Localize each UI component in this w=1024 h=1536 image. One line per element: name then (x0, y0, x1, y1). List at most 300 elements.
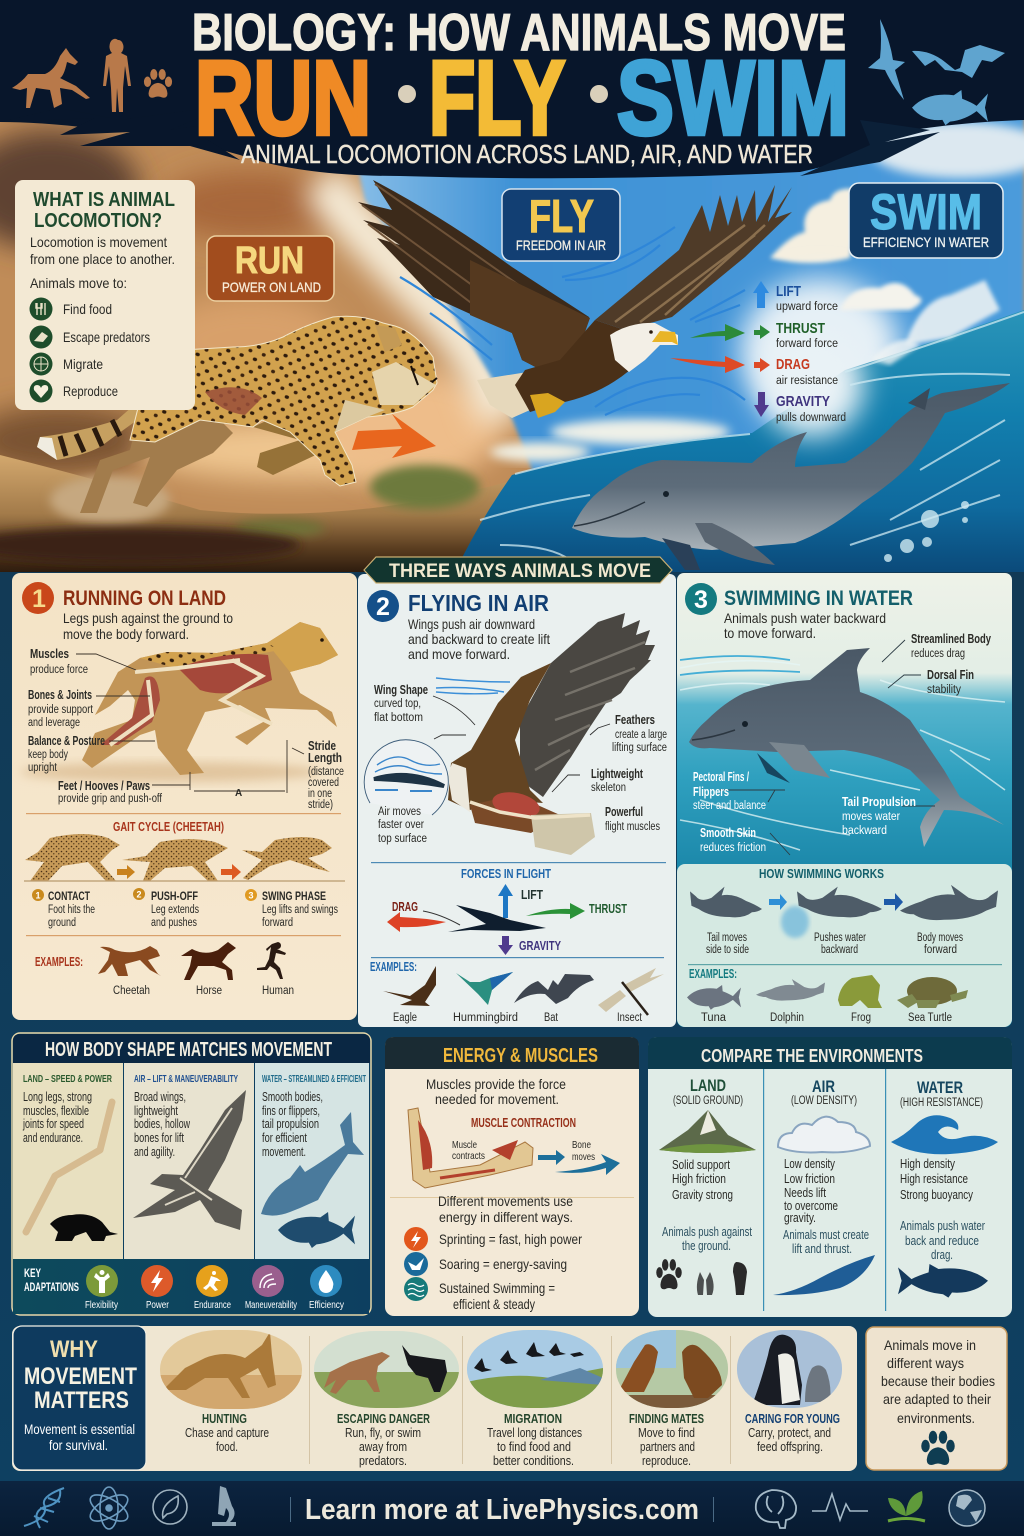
key adaptations strip (13, 1259, 369, 1314)
example: hummingbird (453, 972, 518, 1024)
column: land: Long legs, strong (23, 1090, 92, 1104)
column: water: Smooth bodies, (262, 1090, 323, 1104)
icon: efficiency: Efficiency (309, 1300, 344, 1311)
number badge 1 (22, 582, 54, 614)
heading: FLYING IN AIR (408, 590, 549, 616)
right wing (595, 185, 792, 330)
callout: pectoral fins (693, 770, 766, 812)
icon: flexibility (85, 1265, 118, 1311)
column: land: Gravity strong (672, 1188, 733, 1202)
column: water (255, 1063, 369, 1259)
icon: power: Power (146, 1300, 170, 1311)
column: water (891, 1078, 998, 1298)
callout: streamlined body (911, 632, 991, 660)
step 2 push-off (133, 888, 199, 929)
icon: dna (24, 1488, 64, 1528)
panel 2: flying in air: Wings push air downward (408, 616, 535, 632)
callout: balance: upright (28, 762, 58, 774)
run word: RUN (195, 40, 371, 157)
callout box: closing message: environments. (897, 1410, 975, 1426)
icon: endurance (194, 1265, 231, 1311)
illustration: dark fish (278, 1212, 355, 1248)
examples label: EXAMPLES: (370, 960, 417, 974)
column: land: High friction (672, 1172, 726, 1186)
step 1 contact: 1 (36, 890, 41, 900)
column: air: Broad wings, (134, 1090, 186, 1104)
panel: compare the environments (648, 1037, 1012, 1317)
caption: migration: Travel long distances (487, 1426, 582, 1440)
forces legend: air resistance (776, 375, 838, 387)
step 1 contact: ground (48, 917, 76, 929)
callout: lightweight: skeleton (591, 782, 626, 794)
sub-panel: how swimming works: side to side (706, 944, 749, 956)
dolphin step 3 (900, 885, 998, 920)
callout: feathers: lifting surface (612, 742, 667, 754)
callout: wing shape: flat bottom (374, 712, 423, 724)
inset: airfoil diagram (364, 740, 448, 815)
force diagram: GRAVITY (519, 939, 562, 953)
example: cheetah (98, 946, 161, 997)
callout: muscles: Muscles (30, 647, 69, 661)
column: air (773, 1077, 875, 1295)
panel: energy and muscles: moves (572, 1151, 595, 1163)
separator dot (398, 85, 416, 103)
title line: BIOLOGY: HOW ANIMALS MOVE (192, 4, 846, 62)
panel: energy and muscles: Sprinting = fast, high power (439, 1231, 582, 1247)
column: land: the ground. (682, 1239, 731, 1253)
example: bat (514, 974, 594, 1024)
hero dolphin (572, 383, 1010, 570)
panel: energy and muscles: Bone (572, 1139, 591, 1151)
illustration: black cat (50, 1214, 118, 1241)
column: land: and endurance. (23, 1131, 83, 1145)
callout: dorsal fin: Dorsal Fin (927, 668, 974, 682)
icon: sprinting (404, 1227, 428, 1251)
panel: how body shape matches movement: HOW BODY SHAPE MATCHES MOVEMENT (45, 1039, 332, 1061)
panel: what is animal locomotion: Find food (63, 301, 112, 317)
callout box: closing message: different ways (887, 1355, 964, 1371)
column: water: back and reduce (905, 1234, 979, 1248)
callout: stride length: Length (308, 751, 342, 765)
vignette: escaping danger (314, 1331, 459, 1408)
icon: wave (891, 1115, 998, 1154)
panel: energy and muscles: energy in different ways. (439, 1209, 573, 1225)
gait heading: GAIT CYCLE (CHEETAH) (113, 820, 224, 834)
callout: air moves (378, 806, 427, 845)
panel: what is animal locomotion: Locomotion is movement (30, 234, 167, 250)
top title band (0, 0, 1024, 178)
step 3 swing phase: SWING PHASE (262, 889, 326, 903)
callout: muscles: produce force (30, 664, 88, 676)
icon: bird silhouette (868, 19, 905, 100)
callout: tail propulsion: moves water (842, 811, 900, 823)
number badge 3: 3 (694, 586, 708, 614)
step 2 push-off: and pushes (151, 917, 197, 929)
vignette: finding mates (616, 1330, 728, 1408)
swim word: SWIM (617, 40, 849, 157)
panel: energy and muscles: Muscles provide the force (426, 1076, 566, 1092)
forces legend: pulls downward (776, 412, 846, 424)
column: air: (LOW DENSITY) (791, 1095, 857, 1107)
caption: caring for young (745, 1412, 840, 1454)
panel 1: running on land: move the body forward. (63, 626, 189, 642)
force diagram: THRUST (589, 902, 627, 916)
body (515, 320, 630, 412)
callout: pectoral fins: steer and balance (693, 800, 766, 812)
forces legend (670, 281, 846, 424)
caption: migration: MIGRATION (504, 1412, 562, 1426)
panel 2: flying in air: and backward to create lift (408, 631, 550, 647)
vignette: migration (467, 1330, 603, 1408)
icon: heart (30, 380, 52, 402)
step 3 swing phase: forward (262, 917, 293, 929)
icon: maneuverability: Maneuverability (245, 1300, 297, 1311)
panel: energy and muscles: MUSCLE CONTRACTION (471, 1116, 576, 1130)
callout: lightweight (591, 767, 644, 794)
column: water: WATER – STREAMLINED & EFFICIENT (262, 1074, 366, 1085)
sea (455, 310, 1024, 572)
step 3 swing phase: 3 (248, 890, 254, 900)
caption: hunting (185, 1412, 269, 1454)
drag label: DRAG (776, 356, 810, 373)
step 1 contact: Foot hits the (48, 904, 95, 916)
icon: horse (12, 48, 90, 108)
column: air: to overcome (784, 1199, 838, 1213)
dolphin step 2 (797, 887, 882, 917)
example: frog: Frog (851, 1012, 871, 1024)
icon: globe (30, 352, 52, 376)
tail (37, 370, 160, 460)
heading: RUNNING ON LAND (63, 587, 226, 610)
run badge: RUN (235, 240, 304, 282)
callout: pectoral fins: Flippers (693, 785, 729, 799)
sub-panel: how swimming works: backward (821, 944, 858, 956)
icon: endurance: Endurance (194, 1300, 231, 1311)
callout: balance: keep body (28, 749, 68, 761)
column: land (13, 1063, 123, 1259)
column: air (124, 1063, 254, 1259)
example: insect (598, 968, 664, 1024)
column: water: (HIGH RESISTANCE) (900, 1097, 983, 1109)
hero cheetah running (37, 316, 437, 513)
column: land: Animals push against (662, 1225, 752, 1239)
example: horse (181, 942, 236, 997)
caption: escaping danger: Run, fly, or swim (345, 1426, 421, 1440)
panel: what is animal locomotion: from one place to another. (30, 251, 175, 267)
panel 2: flying in air (358, 574, 676, 1027)
column: water: Strong buoyancy (900, 1188, 974, 1202)
callout: air moves: Air moves (378, 806, 421, 818)
column: water: High resistance (900, 1172, 968, 1186)
icon: bat silhouette (912, 45, 1005, 78)
step 3 swing phase: Leg lifts and swings (262, 904, 338, 916)
callout box: closing message: are adapted to their (883, 1391, 991, 1407)
rear legs (80, 400, 233, 513)
callout: feathers: Feathers (615, 713, 655, 727)
example: dolphin: Dolphin (770, 1012, 804, 1024)
arrow: step (884, 893, 903, 911)
heading: SWIMMING IN WATER (724, 587, 913, 610)
icon: power (141, 1265, 173, 1311)
panel 3: swimming in water (677, 573, 1012, 1027)
talons (530, 393, 565, 418)
callout: tail propulsion (842, 795, 916, 837)
step 2 push-off: PUSH-OFF (151, 889, 198, 903)
arrow: lift (753, 281, 769, 308)
vignette: caring for young (737, 1330, 842, 1408)
caption: hunting: Chase and capture (185, 1426, 269, 1440)
example: frog (838, 975, 882, 1024)
icon: pulse (812, 1494, 868, 1520)
gravity label: GRAVITY (776, 393, 830, 410)
arrow: bone moves (555, 1154, 620, 1175)
callout: tail propulsion: backward (842, 825, 887, 837)
callout: stride length (308, 739, 344, 811)
caption: hunting: food. (216, 1440, 238, 1454)
tail (477, 370, 540, 418)
dolphin step 1 (690, 887, 762, 917)
key adaptations strip: ADAPTATIONS (24, 1280, 79, 1294)
sub-panel: how swimming works: Pushes water (814, 932, 866, 944)
forces heading: FORCES IN FLIGHT (461, 867, 551, 881)
icon: microscope (212, 1486, 236, 1526)
illustration: blue fish (261, 1112, 364, 1216)
run badge (207, 236, 334, 301)
example: insect: Insect (617, 1012, 643, 1024)
icon: human (103, 39, 131, 112)
sub-panel: how swimming works: HOW SWIMMING WORKS (759, 867, 884, 881)
step 3 swing phase (245, 889, 338, 929)
sub-panel: how swimming works (677, 864, 1012, 1027)
callout: bones: Bones & Joints (28, 688, 92, 702)
panel 1: running on land: Legs push against the ground to (63, 610, 233, 626)
title block: Movement is essential (24, 1422, 135, 1437)
column: land: (SOLID GROUND) (673, 1095, 743, 1107)
clouds (770, 189, 860, 263)
thrust label: THRUST (776, 320, 825, 337)
caption: finding mates (629, 1412, 704, 1468)
column: land (656, 1076, 756, 1295)
column: air: Needs lift (784, 1186, 826, 1200)
callout lines (433, 696, 610, 792)
icon: swimming (404, 1277, 428, 1301)
callout: muscles (30, 647, 88, 676)
arrow: gravity (754, 392, 769, 417)
title block: for survival. (49, 1438, 108, 1453)
key adaptations strip: KEY (24, 1266, 41, 1280)
caption: finding mates: Move to find (638, 1426, 695, 1440)
callout: powerful (605, 805, 660, 833)
section banner: three ways animals move: THREE WAYS ANIMALS MOVE (389, 561, 651, 582)
callout: feet: provide grip and push-off (58, 793, 163, 805)
caption: finding mates: partners and (640, 1440, 695, 1454)
panel 3: swimming in water: to move forward. (724, 625, 816, 641)
callout lines (76, 654, 304, 793)
column: air: bodies, hollow (134, 1117, 191, 1131)
caption: escaping danger (337, 1412, 430, 1468)
panel: energy and muscles: Soaring = energy-saving (439, 1256, 567, 1272)
caption: hunting: HUNTING (202, 1412, 247, 1426)
panel: what is animal locomotion: LOCOMOTION? (34, 210, 162, 232)
column: air: lift and thrust. (792, 1242, 852, 1256)
example: tuna: Tuna (701, 1012, 727, 1024)
step 2 push-off: Leg extends (151, 904, 199, 916)
column: water: WATER (917, 1078, 963, 1097)
footer link text: Learn more at LivePhysics.com (305, 1494, 699, 1526)
caption: caring for young: feed offspring. (757, 1440, 823, 1454)
callout: stride length: Stride (308, 739, 336, 753)
panel 1: running on land (12, 573, 357, 1020)
panel: energy and muscles: Muscle (452, 1139, 477, 1151)
column: air: bones for lift (134, 1131, 184, 1145)
header (648, 1037, 1012, 1069)
column: air: gravity. (784, 1211, 816, 1225)
callout: feet: Feet / Hooves / Paws (58, 779, 150, 793)
panel: energy and muscles: efficient & steady (453, 1296, 535, 1312)
icon: paw print (144, 69, 172, 98)
column: water: drag. (931, 1248, 953, 1262)
column: air: Low friction (784, 1172, 835, 1186)
callout: wing shape (374, 683, 428, 724)
gait illustrations (24, 834, 345, 881)
callout: stride length: in one (308, 788, 332, 800)
callout: stride length: covered (308, 777, 339, 789)
illustration: bird skeleton (133, 1090, 246, 1230)
example: dolphin (756, 979, 825, 1024)
title block: WHY (50, 1336, 98, 1363)
hero scene (0, 110, 1024, 572)
fly badge: FREEDOM IN AIR (516, 238, 606, 253)
arrow: drag (670, 356, 770, 373)
illustration: leg bone (26, 1102, 112, 1232)
fly badge (502, 189, 620, 261)
column: water: movement. (262, 1145, 306, 1159)
header (385, 1037, 639, 1069)
panel: energy and muscles: contracts (452, 1150, 485, 1162)
icon: find food (30, 298, 52, 320)
column: land: LAND – SPEED & POWER (23, 1074, 113, 1085)
callout: wing shape: curved top, (374, 698, 421, 710)
callout: bones: and leverage (28, 717, 80, 729)
caption: escaping danger: predators. (359, 1454, 407, 1468)
example: hummingbird: Hummingbird (453, 1012, 518, 1024)
column: water: Animals push water (900, 1219, 985, 1233)
far front leg (253, 410, 335, 475)
water streaks (680, 661, 1005, 850)
callout: streamlined body: reduces drag (911, 648, 965, 660)
head (610, 323, 678, 372)
left wing (358, 180, 589, 372)
separator dot (590, 85, 608, 103)
panel 2: flying in air: and move forward. (408, 646, 510, 662)
caption: migration: to find food and (497, 1440, 571, 1454)
callout box: closing message: because their bodies (881, 1373, 995, 1389)
callout: stride length: (distance (308, 766, 344, 778)
panel: compare the environments: COMPARE THE ENVIRONMENTS (701, 1046, 923, 1066)
footer (0, 1481, 1024, 1536)
panel: energy and muscles: ENERGY & MUSCLES (443, 1045, 598, 1067)
callout: powerful: flight muscles (605, 821, 660, 833)
sub-panel: how swimming works: Body moves (917, 932, 963, 944)
panel: energy and muscles (385, 1037, 639, 1316)
icon: globe (949, 1490, 985, 1526)
example: tuna (687, 985, 741, 1024)
run badge: POWER ON LAND (222, 279, 321, 295)
icon: maneuverability (245, 1265, 297, 1311)
caption: escaping danger: away from (359, 1440, 407, 1454)
lift label: LIFT (776, 283, 801, 300)
header (13, 1034, 370, 1063)
panel: what is animal locomotion: Animals move to: (30, 275, 127, 291)
example: cheetah: Cheetah (113, 985, 150, 997)
callout: powerful: Powerful (605, 805, 643, 819)
number badge 3 (685, 583, 717, 615)
hero eagle flying (358, 180, 792, 418)
callout: smooth skin (700, 826, 766, 854)
column: air: AIR (812, 1077, 835, 1096)
example: eagle (383, 966, 436, 1024)
caption: migration (487, 1412, 582, 1468)
icon: paw (921, 1431, 955, 1465)
force diagram (387, 884, 627, 955)
callout: bones: provide support (28, 704, 94, 716)
forces legend: upward force (776, 301, 838, 313)
panel: energy and muscles: Sustained Swimming = (439, 1280, 555, 1296)
callout: smooth skin: reduces friction (700, 842, 766, 854)
icon: soaring (404, 1252, 428, 1276)
arrow: gait step (117, 865, 135, 879)
callout: air moves: faster over (378, 819, 424, 831)
panel: why movement matters (12, 1326, 857, 1471)
icons: tracks (656, 1259, 747, 1295)
callout: stride length: stride) (308, 799, 333, 811)
column: air: and agility. (134, 1145, 175, 1159)
icon: fish silhouette (912, 90, 988, 125)
panel: what is animal locomotion: Migrate (63, 356, 103, 372)
subtitle: ANIMAL LOCOMOTION ACROSS LAND, AIR, AND WATER (241, 139, 813, 169)
column: land: Solid support (672, 1158, 730, 1172)
caption: finding mates: reproduce. (642, 1454, 691, 1468)
icon: escape (30, 326, 52, 348)
callout: bones (28, 688, 94, 729)
example: bat: Bat (544, 1012, 559, 1024)
panel: energy and muscles: Different movements use (438, 1193, 573, 1209)
panel: what is animal locomotion (15, 180, 195, 410)
sub-panel: how swimming works: Tail moves (707, 932, 747, 944)
caption: caring for young: Carry, protect, and (748, 1426, 831, 1440)
column: air: AIR – LIFT & MANEUVERABILITY (134, 1074, 238, 1085)
arrow: muscle to bone (538, 1150, 565, 1165)
column: water: High density (900, 1157, 956, 1171)
callout: feet (58, 779, 163, 805)
number badge 2: 2 (376, 593, 390, 621)
air flow lines (436, 678, 510, 694)
callout: feathers (612, 713, 667, 754)
panel: how body shape matches movement (12, 1033, 371, 1315)
column: land: muscles, flexible (23, 1104, 89, 1118)
icon: flexibility: Flexibility (85, 1300, 118, 1311)
example: eagle: Eagle (393, 1012, 417, 1024)
callout box: closing message (866, 1327, 1007, 1470)
icon: cloud (778, 1117, 870, 1152)
fly badge: FLY (529, 190, 594, 242)
ground (0, 455, 515, 572)
airflow lines (400, 227, 745, 415)
icon: fish (898, 1264, 988, 1298)
body (130, 316, 437, 486)
example: horse: Horse (196, 985, 222, 997)
step 2 push-off: 2 (136, 890, 142, 900)
